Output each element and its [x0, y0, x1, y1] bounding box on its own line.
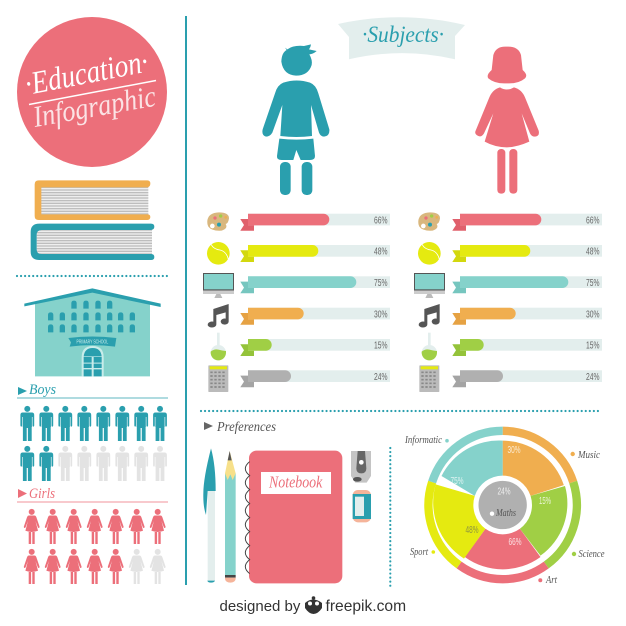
- notebook label: Notebook: [268, 473, 323, 492]
- row: science 15%: [422, 333, 602, 360]
- segment values: 24%: [498, 486, 510, 498]
- icon: stacked books: [31, 180, 154, 260]
- pictogram: girls: [24, 509, 166, 584]
- donut chart: subjects: [404, 431, 605, 586]
- label: Music: [570, 449, 600, 461]
- row: informatic 75%: [203, 273, 390, 298]
- icon: sharpener: [351, 451, 371, 483]
- footer credit: designed by: [220, 598, 301, 615]
- icon: pencil: [225, 451, 236, 583]
- subject bars: boys: [203, 212, 390, 392]
- segment values: 66%: [508, 536, 522, 548]
- icon: eraser: [353, 490, 371, 522]
- row: science 15%: 15%: [374, 341, 388, 352]
- footer credit: freepik.com: [326, 598, 406, 615]
- icon: pen: [203, 448, 216, 583]
- row: art 66%: 66%: [374, 215, 388, 226]
- label: Art: [538, 574, 558, 586]
- row: art 66%: [207, 212, 390, 231]
- row: maths 24%: 24%: [374, 372, 388, 383]
- row: informatic 75%: [414, 273, 602, 298]
- segment values: [450, 444, 551, 548]
- ribbon: Subjects: ·Subjects·: [362, 22, 444, 47]
- row: science 15%: 15%: [586, 341, 600, 352]
- row: maths 24%: [419, 365, 602, 392]
- figure: boy: [262, 44, 329, 195]
- label: Maths: Maths: [495, 507, 516, 519]
- heading: Preferences: Preferences: [216, 420, 276, 435]
- label: Science: Science: [578, 548, 605, 560]
- label: Sport: Sport: [410, 546, 429, 558]
- segment values: 75%: [450, 475, 464, 487]
- row: music 30%: 30%: [586, 309, 600, 320]
- outer ring: [428, 431, 577, 579]
- row: music 30%: [419, 304, 602, 328]
- row: sport 48%: 48%: [586, 247, 600, 258]
- divider: left vertical line: [185, 16, 187, 585]
- row: sport 48%: 48%: [374, 247, 388, 258]
- row: music 30%: [208, 304, 390, 328]
- icon: primary school building: [24, 288, 161, 376]
- heading: Boys: [17, 382, 168, 398]
- title: Education: ·Education·: [21, 43, 151, 102]
- footer credit: [220, 596, 406, 615]
- label: Art: Art: [545, 574, 558, 586]
- segment values: 48%: [466, 524, 478, 536]
- row: informatic 75%: 75%: [374, 278, 388, 289]
- heading: Girls: Girls: [29, 486, 55, 502]
- icon: primary school building: PRIMARY SCHOOL: [76, 339, 108, 345]
- pictogram: boys: [20, 406, 167, 481]
- icon: freepik logo: [305, 596, 322, 614]
- row: maths 24%: 24%: [586, 372, 600, 383]
- figure: girl: [475, 47, 539, 194]
- row: music 30%: 30%: [374, 309, 388, 320]
- row: informatic 75%: 75%: [586, 278, 600, 289]
- heading: Boys: Boys: [29, 382, 56, 398]
- pie segments: [433, 441, 567, 569]
- row: art 66%: 66%: [586, 215, 600, 226]
- ribbon: Subjects: [338, 17, 465, 59]
- segment values: 15%: [539, 495, 551, 507]
- label: Music: Music: [577, 449, 600, 461]
- notebook: [245, 451, 342, 583]
- segment values: 30%: [508, 444, 520, 456]
- row: art 66%: [418, 212, 602, 231]
- spiral binding: [245, 462, 250, 574]
- title badge: [17, 17, 167, 167]
- row: sport 48%: [418, 242, 602, 265]
- row: science 15%: [211, 333, 390, 360]
- title: Infographic: Infographic: [30, 80, 158, 134]
- row: sport 48%: [207, 242, 390, 265]
- row: maths 24%: [208, 365, 390, 392]
- heading: Girls: [17, 486, 168, 502]
- subject bars: girls: [414, 212, 602, 392]
- label: Informatic: Informatic: [404, 435, 442, 446]
- label: Maths: [490, 507, 516, 519]
- label: Science: [572, 548, 605, 560]
